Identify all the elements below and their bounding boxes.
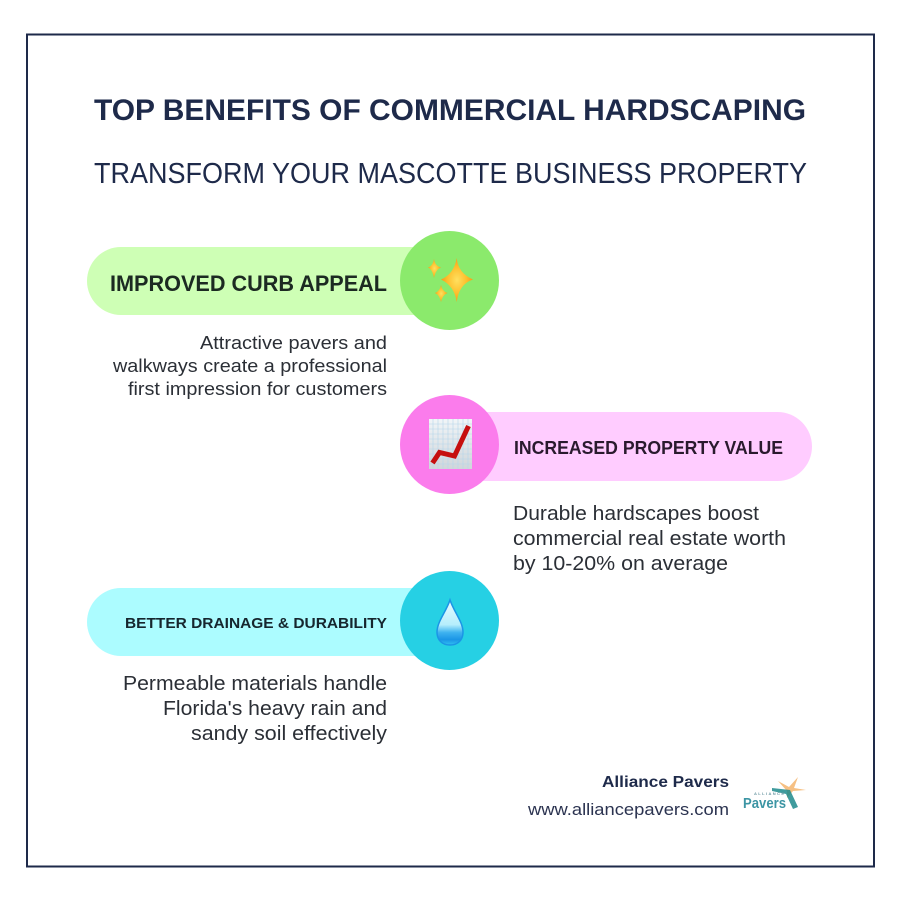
subtitle: TRANSFORM YOUR MASCOTTE BUSINESS PROPERTY	[94, 158, 807, 190]
pill: increased property value	[450, 412, 812, 481]
icon: chart increasing	[429, 419, 472, 469]
panel: increased property value	[400, 395, 812, 575]
heading: better drainage: BETTER DRAINAGE & DURABILITY	[125, 615, 387, 632]
panel: better drainage and durability	[87, 571, 499, 745]
icon circle: pink	[400, 395, 499, 494]
title: TOP BENEFITS OF COMMERCIAL HARDSCAPING	[94, 94, 806, 127]
body text: property value: Durable hardscapes boost	[513, 503, 759, 525]
footer: company name: Alliance Pavers	[602, 774, 729, 791]
icon: water drop	[437, 600, 463, 645]
heading: increased property value: INCREASED PROPERTY VALUE	[514, 438, 783, 458]
body text: property value: commercial real estate worth	[513, 528, 786, 550]
logo: Alliance Pavers	[743, 777, 806, 812]
body text: curb appeal	[112, 332, 387, 399]
pill: better drainage	[87, 588, 447, 656]
body text: property value: by 10-20% on average	[513, 553, 728, 575]
body text: curb appeal: Attractive pavers and	[200, 332, 387, 353]
icon circle: cyan	[400, 571, 499, 670]
footer: website: www.alliancepavers.com	[527, 800, 729, 819]
body text: curb appeal: first impression for customers	[128, 378, 387, 399]
logo: Alliance Pavers: Pavers	[743, 795, 786, 812]
icon circle: green	[400, 231, 499, 330]
body text: curb appeal: walkways create a professional	[112, 355, 387, 376]
body text: drainage: sandy soil effectively	[191, 723, 387, 745]
icon: sparkles	[428, 258, 473, 302]
body text: drainage: Permeable materials handle	[123, 673, 387, 695]
logo: Alliance Pavers: ALLIANCE	[754, 791, 784, 796]
body text: property value	[513, 503, 786, 575]
heading: improved curb appeal: IMPROVED CURB APPEAL	[110, 271, 387, 296]
body text: drainage: Florida's heavy rain and	[163, 698, 387, 720]
panel: improved curb appeal	[87, 231, 499, 399]
pill: improved curb appeal	[87, 247, 447, 315]
body text: drainage	[123, 673, 387, 745]
